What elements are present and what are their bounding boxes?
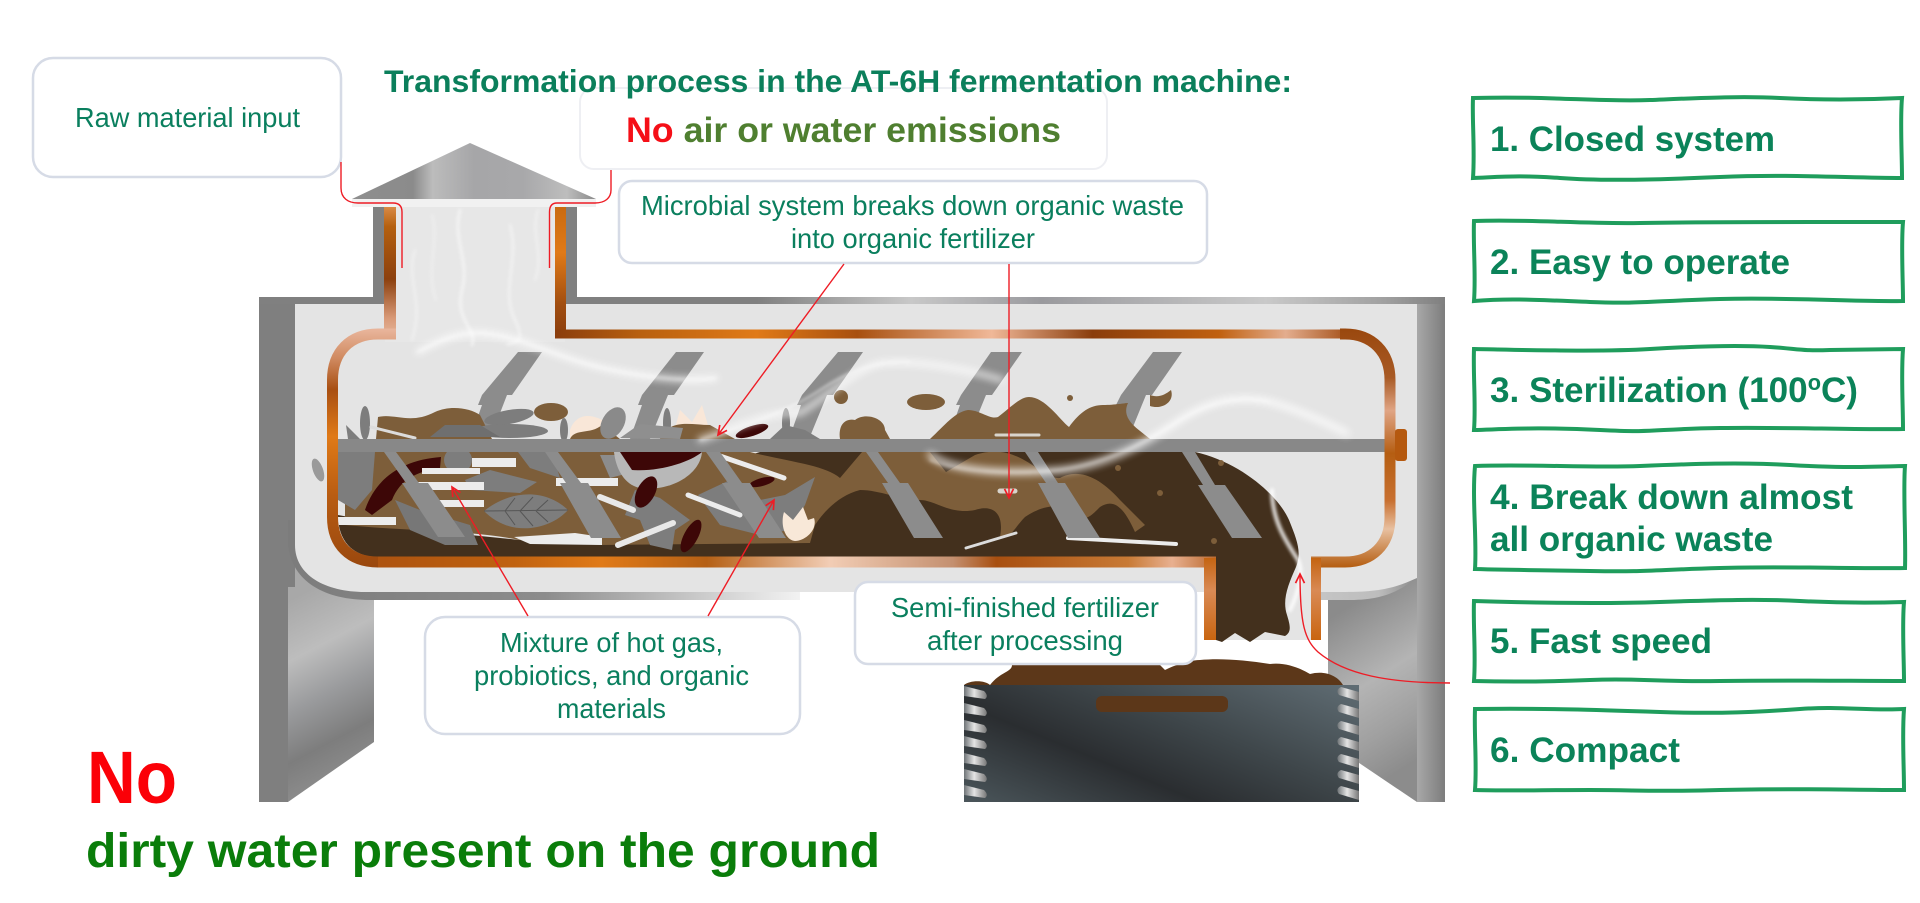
dark red seed pods	[365, 421, 776, 555]
eggshell	[783, 507, 815, 541]
shaft blades above	[470, 352, 1182, 439]
machine legs	[288, 560, 1417, 802]
callout: no emissions box	[580, 88, 1107, 169]
arrows: red leader lines	[341, 162, 1450, 683]
feature 5: 5. Fast speed	[1490, 621, 1712, 661]
bin screws	[964, 686, 1359, 800]
feature 2: 2. Easy to operate	[1490, 242, 1790, 282]
compost mid-brown mounds	[345, 390, 1172, 545]
feature 1	[1473, 97, 1902, 180]
feature 1: 1. Closed system	[1490, 119, 1775, 159]
machine illustration	[259, 143, 1445, 802]
roof cap	[352, 143, 596, 207]
pale crescent	[614, 452, 702, 489]
feature 2	[1474, 221, 1903, 303]
heading: No: No	[87, 736, 177, 819]
feature 6	[1475, 708, 1904, 791]
callout: mixture	[425, 617, 800, 734]
feature 6: 6. Compact	[1490, 730, 1680, 770]
feature 3: 3. Sterilization (100	[1490, 370, 1812, 410]
feature 3	[1474, 346, 1903, 431]
feature 5	[1474, 600, 1904, 682]
feature 4: 4. Break down almost	[1490, 477, 1853, 517]
title: Transformation process in the AT-6H fermentation machine:	[384, 63, 1292, 99]
copper chamber pipework	[332, 207, 1407, 640]
steam in chimney	[412, 210, 539, 345]
peach foam	[570, 405, 712, 439]
organic waste: gray leaves	[309, 403, 820, 550]
feature 4	[1474, 463, 1905, 571]
feature 4: all organic waste	[1490, 519, 1773, 559]
heading: dirty water present on the ground: dirty water present on the ground	[86, 825, 880, 878]
callout: mixture: materials	[557, 693, 666, 724]
heading: no air or water emissions: No air or water emissions	[626, 110, 1061, 150]
feature 3: C)	[1821, 370, 1858, 410]
panel: feature list	[1473, 97, 1905, 791]
machine housing	[259, 207, 1445, 802]
callout: microbial system: Microbial system breaks down organic waste	[641, 190, 1184, 221]
collection bin	[964, 659, 1359, 802]
callout: raw material input	[33, 58, 341, 177]
steam swirls	[418, 333, 1347, 610]
callout: microbial system: into organic fertilizer	[791, 223, 1035, 254]
callout: semi-finished fertilizer: after processing	[927, 625, 1123, 656]
callout: mixture: Mixture of hot gas,	[500, 627, 723, 658]
callout: semi-finished fertilizer: Semi-finished fertilizer	[891, 592, 1159, 623]
feature 3: o	[1808, 370, 1821, 395]
callout: raw material input: Raw material input	[75, 102, 300, 133]
compost dark mass and chute	[338, 452, 1299, 642]
callout: mixture: probiotics, and organic	[474, 660, 749, 691]
callout: semi-finished fertilizer	[855, 582, 1196, 664]
leaf veins	[484, 497, 568, 526]
shaft	[338, 439, 1386, 452]
callout: microbial system	[619, 181, 1207, 263]
white sticks	[338, 458, 618, 545]
medium dots	[1115, 460, 1224, 544]
shaft blades below	[384, 452, 1262, 538]
